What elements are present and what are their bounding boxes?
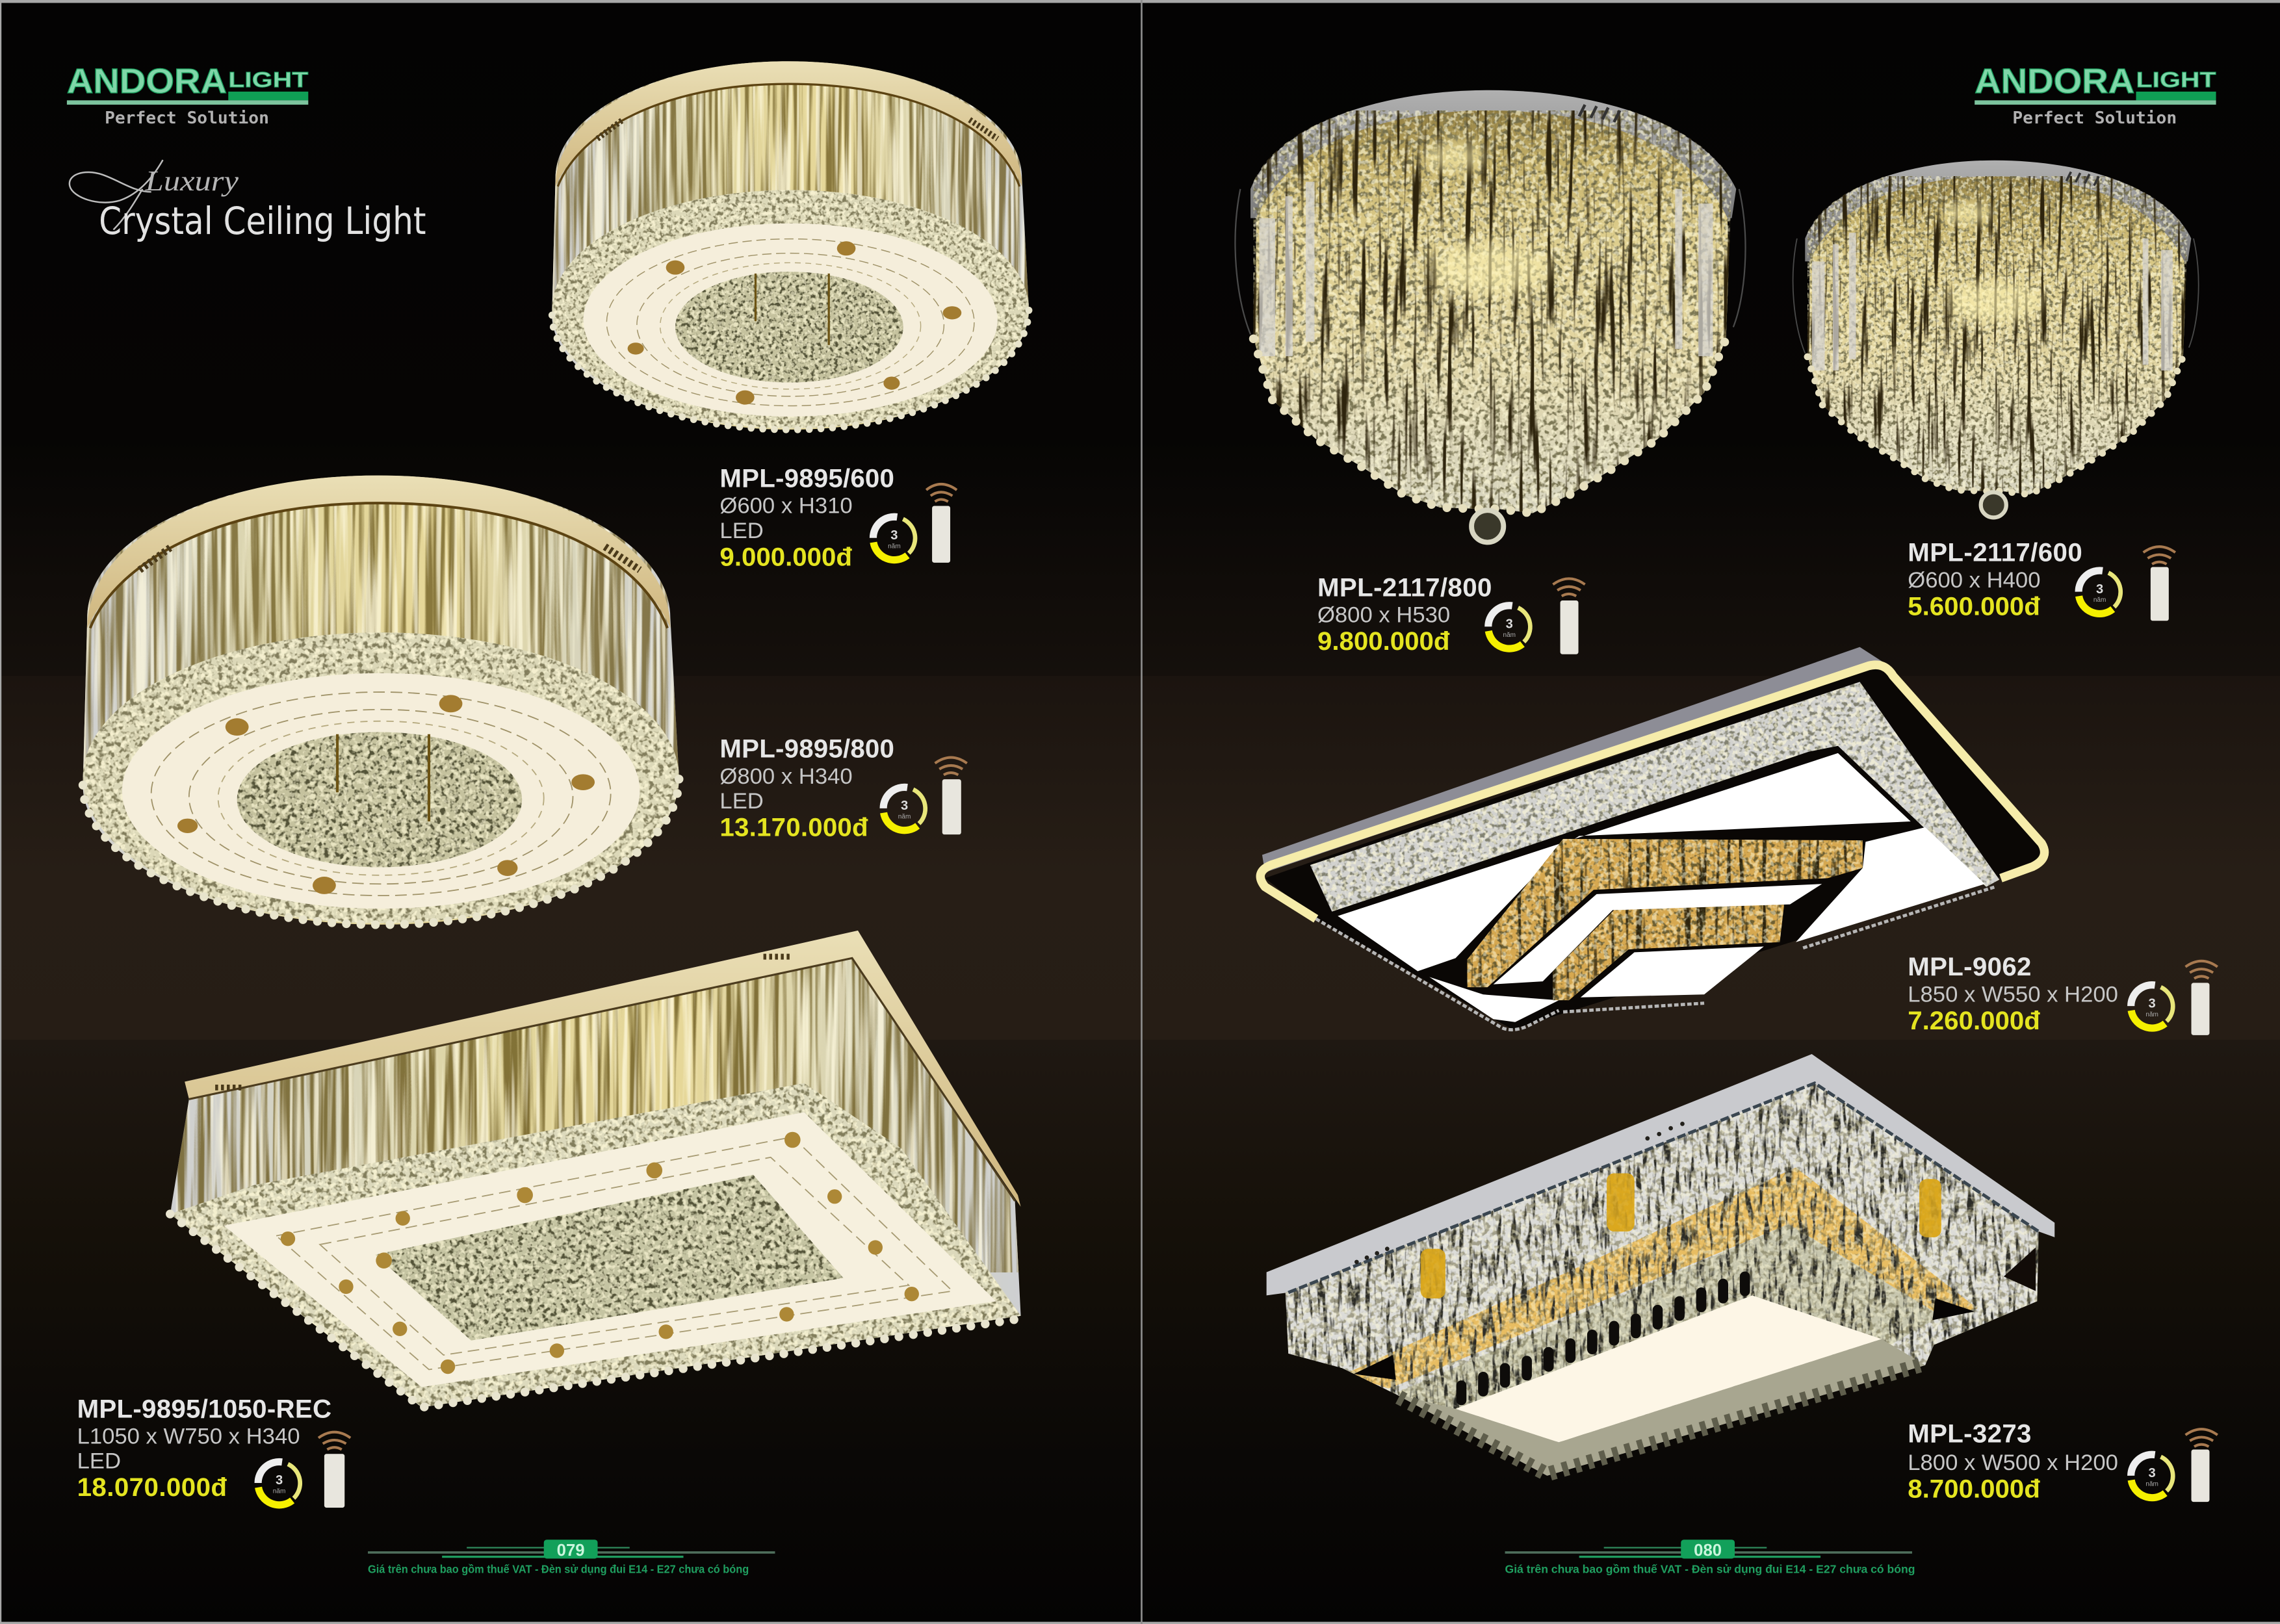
title: Luxury Crystal Ceiling Light	[70, 160, 426, 243]
logo: Andora Light right: Perfect Solution	[2012, 109, 2177, 128]
product photo: MPL-9895/800 round crystal lamp	[80, 476, 684, 926]
product photo: MPL-9895/1050-REC rectangular crystal lamp	[167, 931, 1025, 1410]
icon: 3 year warranty ring: năm	[2145, 1480, 2158, 1488]
icon: remote control	[2144, 547, 2175, 621]
product info: MPL-9895/600: MPL-9895/600	[719, 463, 894, 493]
icon: 3 year warranty ring: 3	[2149, 996, 2156, 1011]
product info: MPL-9062: L850 x W550 x H200	[1908, 982, 2118, 1007]
logo: Andora Light left: ANDORA	[67, 62, 227, 101]
icon: 3 year warranty ring: năm	[888, 543, 901, 550]
icon: 3 year warranty ring: năm	[2093, 597, 2106, 604]
icon: 3 year warranty ring	[258, 1462, 300, 1505]
logo: Andora Light right: LIGHT	[2136, 68, 2216, 92]
product info: MPL-9895/800: 13.170.000đ	[719, 812, 868, 842]
footer: page number 079 and note	[368, 1540, 775, 1576]
logo: Andora Light left: Perfect Solution	[105, 109, 269, 128]
page 080	[1235, 62, 2218, 1576]
product info: MPL-2117/600	[1908, 538, 2082, 621]
icon: 3 year warranty ring: 3	[1506, 617, 1513, 631]
icon: 3 year warranty ring	[883, 787, 926, 831]
icon: 3 year warranty ring: 3	[276, 1473, 283, 1488]
title: Luxury Crystal Ceiling Light: Luxury	[145, 164, 239, 197]
logo: Andora Light left	[67, 62, 309, 128]
product info: MPL-9895/1050-REC: LED	[77, 1449, 121, 1474]
icon: remote control	[935, 758, 967, 834]
footer: page number 080 and note: 080	[1694, 1541, 1722, 1560]
footer: page number 079 and note: 079	[557, 1541, 585, 1560]
product info: MPL-9895/1050-REC: 18.070.000đ	[77, 1473, 227, 1502]
product info: MPL-9895/600: Ø600 x H310	[719, 494, 853, 519]
product info: MPL-2117/800	[1317, 573, 1492, 656]
icon: 3 year warranty ring: năm	[273, 1488, 285, 1495]
icon: 3 year warranty ring: 3	[2096, 582, 2103, 597]
product info: MPL-9895/1050-REC: MPL-9895/1050-REC	[77, 1394, 331, 1423]
product info: MPL-2117/800: 9.800.000đ	[1317, 626, 1450, 656]
icon: remote control	[926, 484, 957, 563]
icon: 3 year warranty ring	[873, 517, 915, 560]
product info: MPL-2117/600: MPL-2117/600	[1908, 538, 2082, 567]
product photo: MPL-9062 rectangular LED crystal lamp	[1260, 647, 2045, 1030]
page 079	[67, 61, 1032, 1576]
icon: remote control	[2186, 961, 2218, 1035]
product info: MPL-9895/800: LED	[719, 789, 764, 814]
product info: MPL-9895/800	[719, 734, 894, 842]
icon: 3 year warranty ring	[2131, 1454, 2173, 1498]
product info: MPL-9895/600: LED	[719, 519, 764, 543]
footer: page number 080 and note: Giá trên chưa bao gồm thuế VAT - Đèn sử dụng đui E14 - E27 chưa có bóng	[1505, 1563, 1915, 1576]
product info: MPL-9895/600	[719, 463, 894, 571]
product photo: MPL-3273 rectangular chrome crystal lamp	[1267, 1054, 2054, 1478]
icon: 3 year warranty ring	[2079, 571, 2121, 613]
logo: Andora Light right: ANDORA	[1975, 62, 2134, 101]
icon: 3 year warranty ring: 3	[901, 799, 908, 813]
icon: 3 year warranty ring: năm	[1503, 632, 1516, 639]
product info: MPL-9895/600: 9.000.000đ	[719, 542, 852, 571]
product info: MPL-2117/600: 5.600.000đ	[1908, 591, 2040, 621]
product info: MPL-9895/800: MPL-9895/800	[719, 734, 894, 764]
icon: 3 year warranty ring	[2131, 985, 2173, 1028]
icon: remote control	[2186, 1429, 2218, 1502]
product info: MPL-9895/800: Ø800 x H340	[719, 764, 853, 789]
product info: MPL-9062: 7.260.000đ	[1908, 1006, 2040, 1035]
icon: 3 year warranty ring: năm	[898, 814, 911, 821]
spine between pages	[1141, 0, 1143, 1624]
product photo: MPL-2117/600 pendant crystal lamp	[1793, 161, 2199, 517]
product info: MPL-3273: L800 x W500 x H200	[1908, 1450, 2118, 1475]
logo: Andora Light left: LIGHT	[228, 68, 309, 92]
product info: MPL-9062: MPL-9062	[1908, 952, 2031, 981]
product photo: MPL-9895/600 round crystal lamp	[550, 61, 1032, 431]
icon: 3 year warranty ring: năm	[2145, 1011, 2158, 1018]
product info: MPL-3273	[1908, 1419, 2118, 1503]
title: Luxury Crystal Ceiling Light: Crystal Ceiling Light	[99, 199, 426, 243]
icon: 3 year warranty ring	[1488, 606, 1530, 649]
product info: MPL-2117/600: Ø600 x H400	[1908, 568, 2040, 593]
icon: 3 year warranty ring: 3	[890, 528, 898, 543]
footer: page number 079 and note: Giá trên chưa bao gồm thuế VAT - Đèn sử dụng đui E14 - E27 chưa có bóng	[368, 1563, 749, 1576]
product info: MPL-9895/1050-REC: L1050 x W750 x H340	[77, 1424, 300, 1449]
product info: MPL-9895/1050-REC	[77, 1394, 331, 1502]
logo: Andora Light right	[1975, 62, 2216, 128]
icon: remote control	[318, 1432, 350, 1508]
product photo: MPL-2117/800 pendant crystal lamp	[1235, 90, 1746, 542]
icon: 3 year warranty ring: 3	[2149, 1466, 2156, 1480]
product info: MPL-9062	[1908, 952, 2118, 1035]
icon: remote control	[1553, 578, 1585, 654]
footer: page number 080 and note	[1505, 1540, 1915, 1576]
product info: MPL-3273: MPL-3273	[1908, 1419, 2031, 1448]
product info: MPL-2117/800: MPL-2117/800	[1317, 573, 1492, 602]
product info: MPL-3273: 8.700.000đ	[1908, 1474, 2040, 1503]
product info: MPL-2117/800: Ø800 x H530	[1317, 603, 1450, 628]
